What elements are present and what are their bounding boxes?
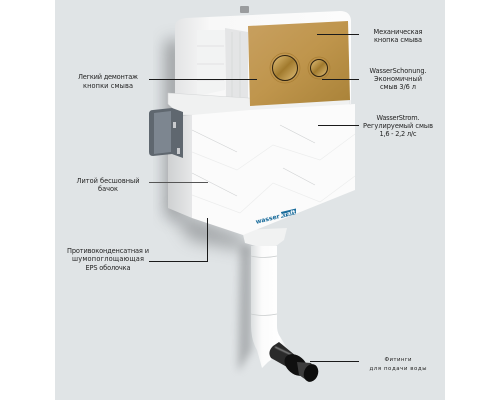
callout lines xyxy=(149,34,359,362)
label: seamless tank: бачок xyxy=(98,185,118,193)
label: mechanical button xyxy=(374,28,423,44)
brand logo xyxy=(255,208,297,226)
product: cistern xyxy=(149,6,355,384)
label: mechanical button: Механическая xyxy=(374,28,423,36)
label: WasserStrom: WasserStrom. xyxy=(376,114,420,122)
tank front xyxy=(168,104,355,235)
valve stud on top xyxy=(240,6,249,13)
label: WasserStrom: Регулируемый смыв xyxy=(363,122,433,130)
label: easy removal: кнопки смыва xyxy=(83,82,133,90)
label: WasserSchonung: Экономичный xyxy=(374,75,422,83)
label: WasserStrom: 1,6 - 2,2 л/с xyxy=(380,130,417,138)
label: easy removal xyxy=(78,73,138,90)
label: fittings: для подачи воды xyxy=(370,366,426,372)
label: seamless tank xyxy=(76,177,140,193)
housing collar xyxy=(168,93,350,116)
brand logo: wasser xyxy=(255,213,281,226)
label: EPS shell: шумопоглощающая xyxy=(72,255,144,263)
label: fittings: Фитинги xyxy=(384,357,412,363)
brand logo: kraft xyxy=(280,210,297,219)
label: WasserSchonung: смыв 3/6 л xyxy=(380,83,416,91)
black water fitting xyxy=(269,342,321,384)
label: easy removal: Легкий демонтаж xyxy=(78,73,138,81)
background panel xyxy=(55,0,445,400)
drain pipe xyxy=(242,228,287,368)
label: EPS shell: Противоконденсатная и xyxy=(67,247,149,255)
wall shadows xyxy=(166,40,252,372)
large flush button xyxy=(270,53,300,83)
gold flush plate xyxy=(248,21,350,106)
label: WasserSchonung xyxy=(370,67,426,91)
label: EPS shell: EPS оболочка xyxy=(86,264,130,272)
label: mechanical button: кнопка смыва xyxy=(374,36,422,44)
small flush button xyxy=(308,57,330,79)
label: seamless tank: Литой бесшовный xyxy=(76,177,140,185)
label: WasserStrom xyxy=(363,114,433,138)
top housing xyxy=(168,6,351,116)
label: EPS shell xyxy=(67,247,149,272)
mounting bracket xyxy=(149,108,183,158)
label: WasserSchonung: WasserSchonung. xyxy=(370,67,426,75)
label: fittings xyxy=(370,357,426,372)
